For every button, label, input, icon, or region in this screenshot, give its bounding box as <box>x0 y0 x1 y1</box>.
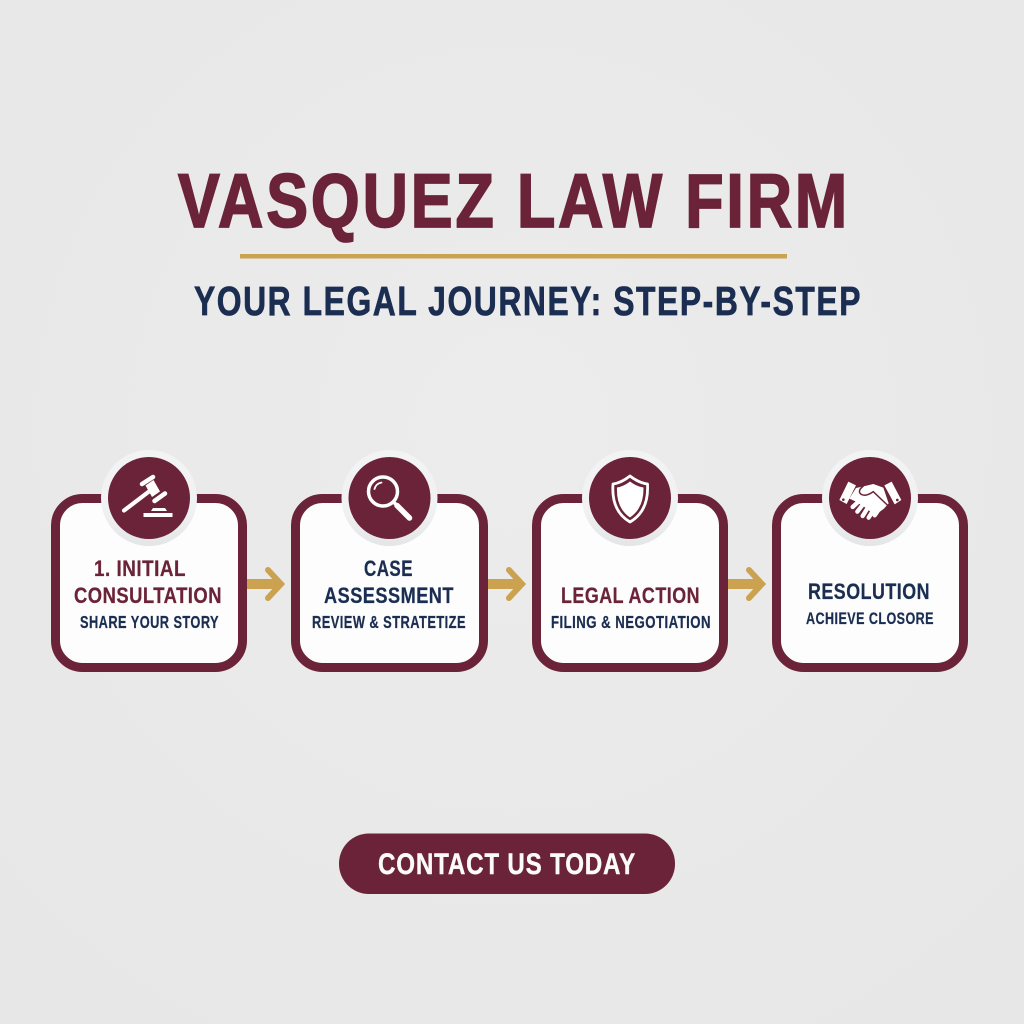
icon badge: shield <box>582 450 678 546</box>
arrow 2 <box>488 570 522 598</box>
card frame <box>296 498 484 668</box>
step heading: 1. INITIAL <box>94 556 186 581</box>
icon badge: magnifying glass <box>342 450 438 546</box>
step heading line 2: ASSESSMENT <box>324 583 454 608</box>
step description: REVIEW & STRATETIZE <box>312 612 466 632</box>
card frame <box>776 498 964 668</box>
step heading: CASE <box>364 556 413 581</box>
step heading line 2: CONSULTATION <box>74 583 222 608</box>
title: VASQUEZ LAW FIRM <box>178 159 850 244</box>
card frame <box>536 498 724 668</box>
step description: FILING & NEGOTIATION <box>551 612 711 632</box>
panel: step 4 resolution <box>776 450 964 668</box>
arrow 3 <box>728 570 762 598</box>
card frame <box>56 498 242 668</box>
icon badge: handshake <box>822 450 918 546</box>
step description: ACHIEVE CLOSORE <box>806 609 934 628</box>
button: contact us today: CONTACT US TODAY <box>378 848 636 881</box>
step heading: RESOLUTION <box>808 579 930 604</box>
step description: SHARE YOUR STORY <box>80 612 219 632</box>
panel: step 1 initial consultation <box>56 450 242 668</box>
panel: step 2 case assessment <box>296 450 484 668</box>
panel: step 3 legal action <box>536 450 724 668</box>
button: contact us today <box>339 834 675 894</box>
arrow 1 <box>247 570 281 598</box>
icon badge: gavel <box>101 450 197 546</box>
gold divider under title <box>240 254 787 258</box>
step heading: LEGAL ACTION <box>561 583 700 608</box>
